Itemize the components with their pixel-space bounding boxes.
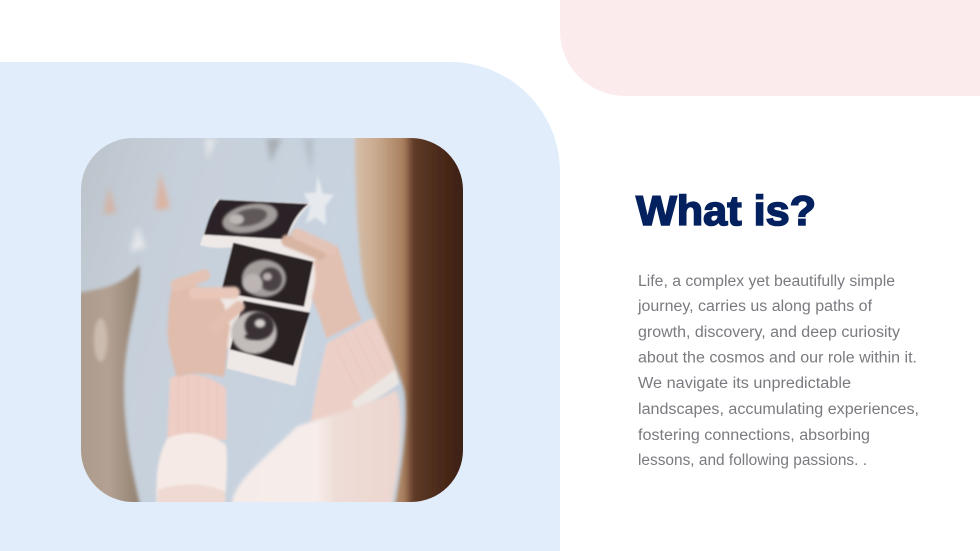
hanging star decorations [103, 138, 314, 252]
right hand [287, 234, 362, 338]
heading: What is? [636, 187, 816, 234]
body text: landscapes, accumulating experiences, [638, 401, 919, 418]
top ultrasound [204, 200, 308, 239]
sleeve ribbing [178, 325, 387, 438]
body text [637, 273, 919, 469]
left sleeve [156, 374, 227, 507]
hair [355, 135, 468, 507]
body text: journey, carries us along paths of [637, 298, 873, 315]
bottom ultrasound [230, 301, 310, 366]
body text: lessons, and following passions. . [638, 452, 867, 469]
body text: fostering connections, absorbing [638, 427, 870, 444]
left hand [167, 275, 239, 377]
photo background wall [81, 138, 407, 502]
sweater back [232, 390, 401, 507]
photo: woman holding ultrasound prints [77, 133, 470, 507]
body text: growth, discovery, and deep curiosity [638, 324, 900, 341]
panel: pink corner shape [560, 0, 980, 96]
prints paper [200, 199, 322, 386]
body text: Life, a complex yet beautifully simple [638, 273, 895, 290]
wooden moon shape [77, 265, 141, 507]
body text: about the cosmos and our role within it. [638, 350, 917, 366]
white star [304, 178, 334, 224]
sweater sleeve right [311, 317, 399, 423]
panel: blue background [0, 62, 560, 551]
body text: We navigate its unpredictable [638, 375, 851, 392]
middle ultrasound [221, 243, 313, 307]
